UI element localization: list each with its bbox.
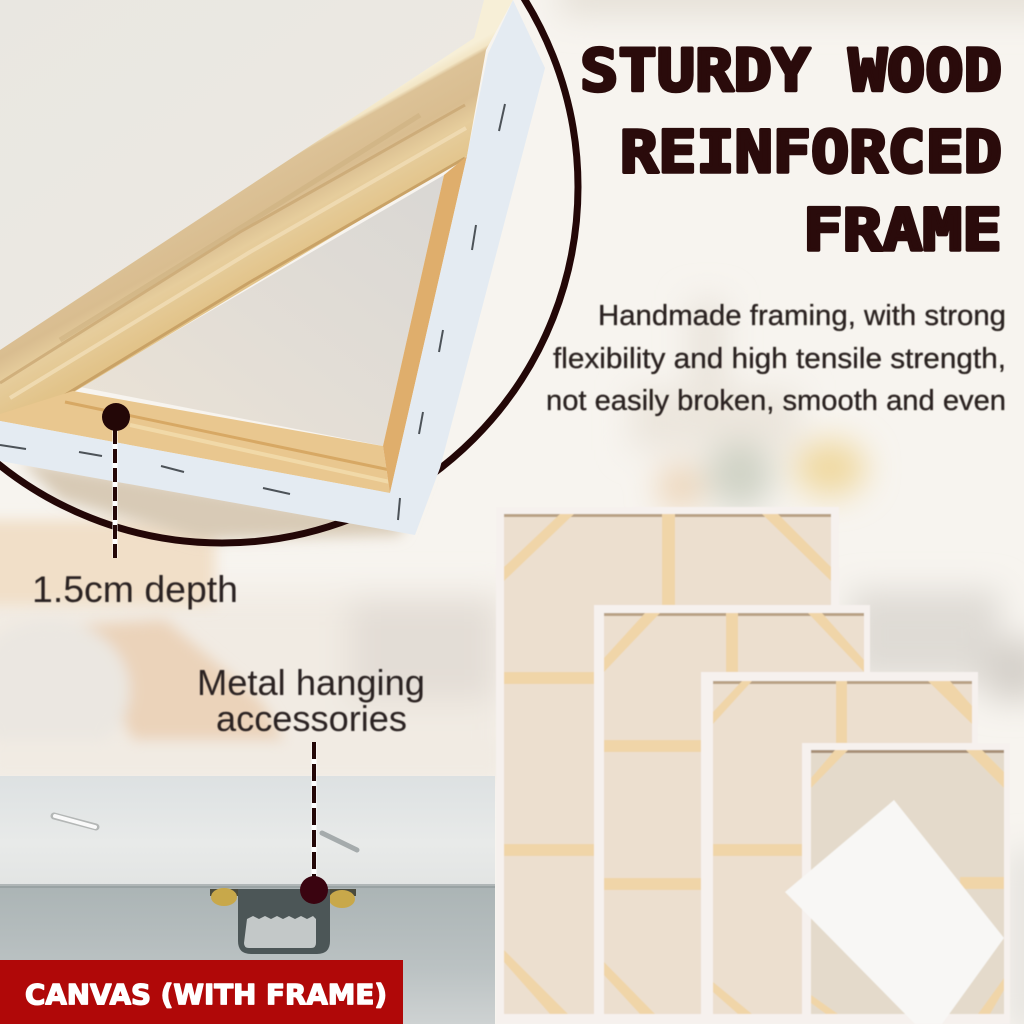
heading: sturdy wood reinforced frame: REINFORCED: [620, 118, 1002, 186]
bottom wooden bar: [0, 391, 390, 493]
heading: sturdy wood reinforced frame: STURDY WOOD: [580, 36, 1002, 104]
icon: staples on canvas edge: [54, 816, 357, 850]
icon: metal sawtooth hanger: [210, 888, 356, 954]
frame 4: [802, 743, 1010, 1024]
frame 3: [701, 672, 978, 1024]
right wooden bar: [383, 156, 467, 493]
callout: hanging accessories marker: Metal hanging: [197, 662, 425, 703]
callout: depth marker: [32, 403, 238, 610]
label bar: canvas with frame: [0, 960, 403, 1024]
text block: description: flexibility and high tensile strength,: [553, 343, 1006, 375]
brown shadow between frame and circle: [20, 460, 425, 540]
callout: hanging accessories marker: accessories: [216, 698, 407, 739]
canvas front surface: [0, 0, 500, 357]
text block: description: Handmade framing, with strong: [598, 300, 1006, 332]
callout: depth marker: 1.5cm depth: [32, 569, 238, 610]
callout: hanging accessories marker: [197, 662, 425, 904]
frame 1: [496, 507, 839, 1024]
frame 2: [594, 605, 870, 1024]
inner canvas back: [80, 175, 444, 446]
text block: description: not easily broken, smooth and even: [546, 385, 1006, 417]
text block: description: [546, 300, 1006, 417]
panel: bottom canvas close-up with hanging hook: [0, 776, 495, 1024]
panel: magnified frame corner inset: [0, 0, 578, 543]
white canvas side wraps: [0, 0, 545, 535]
tilted white canvas: [785, 800, 1004, 1024]
staples: [0, 104, 505, 520]
circle outline of the inset: [0, 0, 578, 543]
top wooden bar: [0, 0, 513, 416]
heading: sturdy wood reinforced frame: [580, 36, 1002, 264]
panel: stacked stretcher frames: [496, 507, 1010, 1024]
heading: sturdy wood reinforced frame: FRAME: [803, 196, 1002, 264]
label bar: canvas with frame: CANVAS (WITH FRAME): [25, 978, 387, 1011]
